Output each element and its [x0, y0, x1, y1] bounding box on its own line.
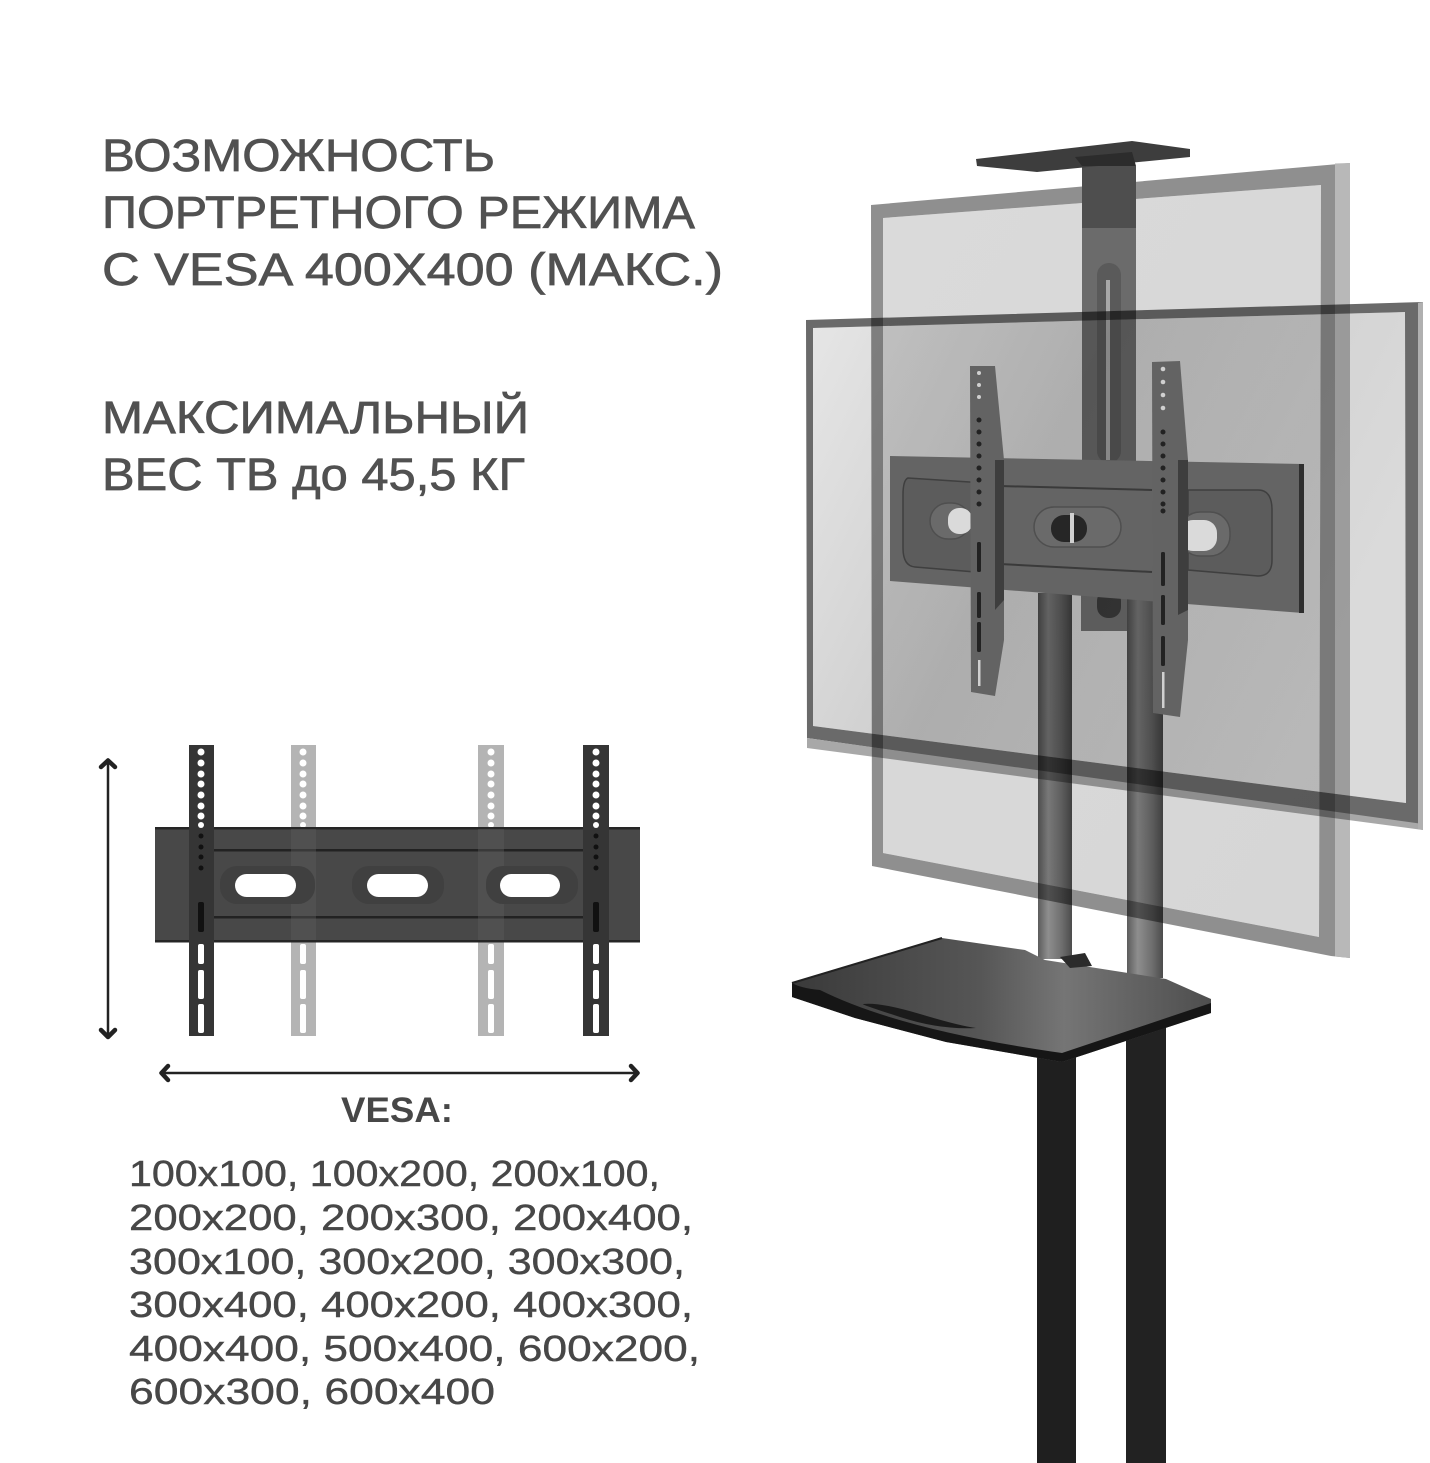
mounting plate	[155, 827, 640, 942]
mount rail left	[970, 366, 1004, 696]
mount rail right	[1152, 361, 1188, 717]
heading: portrait mode: ПОРТРЕТНОГО РЕЖИМА	[102, 187, 695, 238]
label: VESA: VESA:	[341, 1091, 453, 1130]
landscape TV	[806, 302, 1423, 830]
list: VESA sizes: 200x200, 200x300, 200x400,	[129, 1197, 693, 1238]
upper pole right	[1127, 593, 1163, 978]
top column	[1081, 166, 1136, 631]
heading: portrait mode	[102, 130, 723, 295]
gray rail left	[291, 745, 316, 1036]
heading: maximum weight	[102, 392, 529, 500]
list: VESA sizes: 100x100, 100x200, 200x100,	[129, 1153, 660, 1194]
list: VESA sizes: 300x400, 400x200, 400x300,	[129, 1284, 693, 1325]
TV mount plate	[890, 456, 1304, 613]
lower pole right	[1126, 1025, 1166, 1463]
arrow: vertical dimension	[101, 760, 115, 1037]
list: VESA sizes: 400x400, 500x400, 600x200,	[129, 1328, 700, 1369]
diagram: VESA wall bracket	[155, 745, 640, 1036]
illustration: TV stand	[792, 141, 1423, 1463]
heading: portrait mode: ВОЗМОЖНОСТЬ	[102, 130, 495, 181]
top shelf plate	[976, 141, 1190, 172]
list: VESA sizes: 300x100, 300x200, 300x300,	[129, 1241, 685, 1282]
lower shelf	[792, 938, 1211, 1062]
lower pole left	[1037, 1055, 1076, 1463]
portrait TV	[871, 163, 1350, 958]
arrow: horizontal dimension	[162, 1066, 638, 1080]
heading: maximum weight: МАКСИМАЛЬНЫЙ	[102, 392, 529, 443]
gray rail right	[478, 745, 504, 1036]
list: VESA sizes	[129, 1153, 700, 1412]
dark rail left	[189, 745, 214, 1036]
heading: portrait mode: С VESA 400X400 (МАКС.)	[102, 244, 723, 295]
dark rail right	[583, 745, 609, 1036]
list: VESA sizes: 600x300, 600x400	[129, 1371, 495, 1412]
heading: maximum weight: ВЕС ТВ до 45,5 КГ	[102, 449, 525, 500]
upper pole left	[1038, 593, 1072, 959]
